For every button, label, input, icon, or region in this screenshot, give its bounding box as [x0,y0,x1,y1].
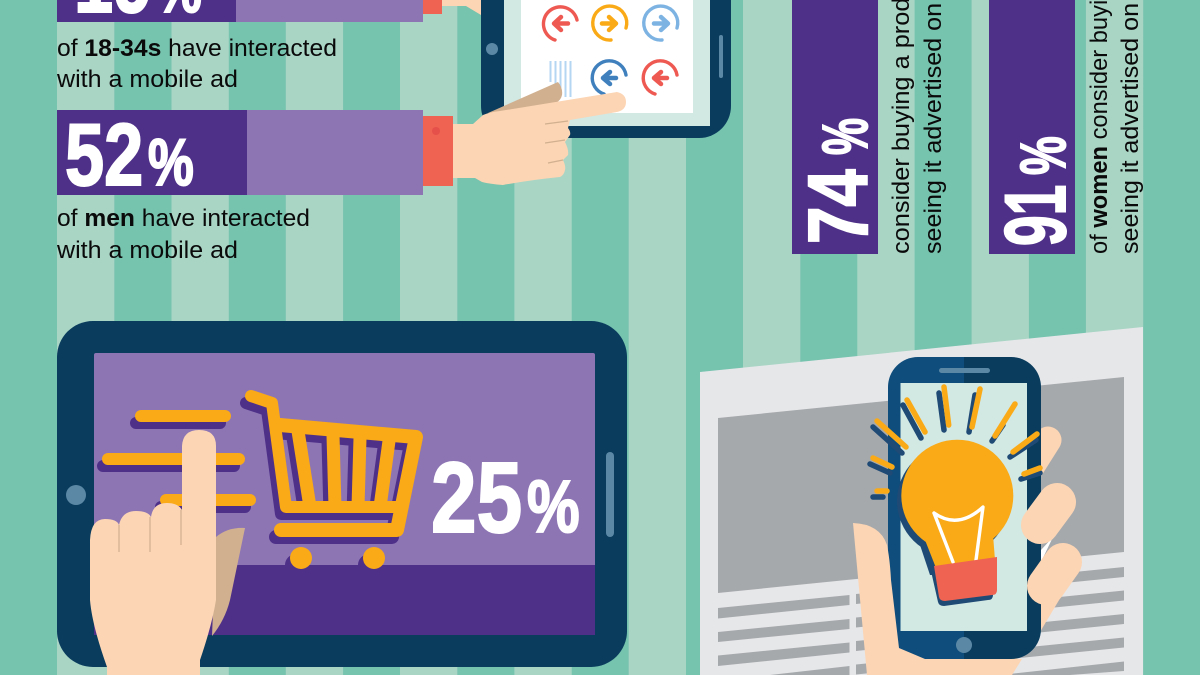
icon: red back arrow [543,7,577,40]
caption: women: seeing it advertised on a [1117,0,1144,254]
bar: 74% [792,0,886,254]
caption: 18-34s: with a mobile ad [56,66,238,93]
stat: 25% [431,442,580,554]
icon: barcode lines [550,61,570,97]
bulb base [931,557,997,606]
cuff: upper [423,0,442,14]
icon: shopping cart [246,396,416,576]
hand: pointing at tablet [453,82,626,185]
bar: 91%: 91 [989,185,1084,246]
bar: 19% [57,0,481,31]
stat: 25%: 25 [431,442,522,554]
bar: 52% [57,105,423,204]
bar: 52%: % [148,125,194,199]
caption: men: of men have interacted [57,205,310,232]
caption: consider buying [888,0,947,254]
hand: tapping tablet [90,430,245,675]
caption: women [1086,0,1144,254]
icon: light bulb [870,387,1040,606]
newspaper [700,327,1143,675]
bar: 91%: % [1007,136,1079,175]
phone [888,357,1041,659]
stat: 25%: % [527,466,580,549]
bar: 74%: % [810,118,881,155]
bar: 52%: 52 [65,105,143,204]
bar: 74%: 74 [792,169,886,244]
caption: 18-34s: of 18-34s have interacted [57,35,337,62]
caption: men: with a mobile ad [56,237,238,264]
tablet: shopping cart [57,321,627,667]
bulb glass [897,440,1013,575]
hand: thumb and fingers over phone [853,502,1063,675]
cuff: red sleeve [423,116,453,186]
icon: light blue forward arrow [644,6,678,40]
icon: red back arrow lower [643,61,677,94]
tablet: top with arrow icons [481,0,731,138]
hand: behind phone [867,440,1074,675]
caption: 18-34s [56,35,337,93]
bulb rays [870,387,1040,497]
caption: men [56,205,310,264]
caption: consider buying: seeing it advertised on a [920,0,947,254]
speed lines [103,416,250,507]
icon: blue back arrow [592,61,626,94]
hand: upper fragment [442,0,481,15]
icon: amber forward arrow [593,6,627,40]
bar: 91% [989,0,1084,254]
